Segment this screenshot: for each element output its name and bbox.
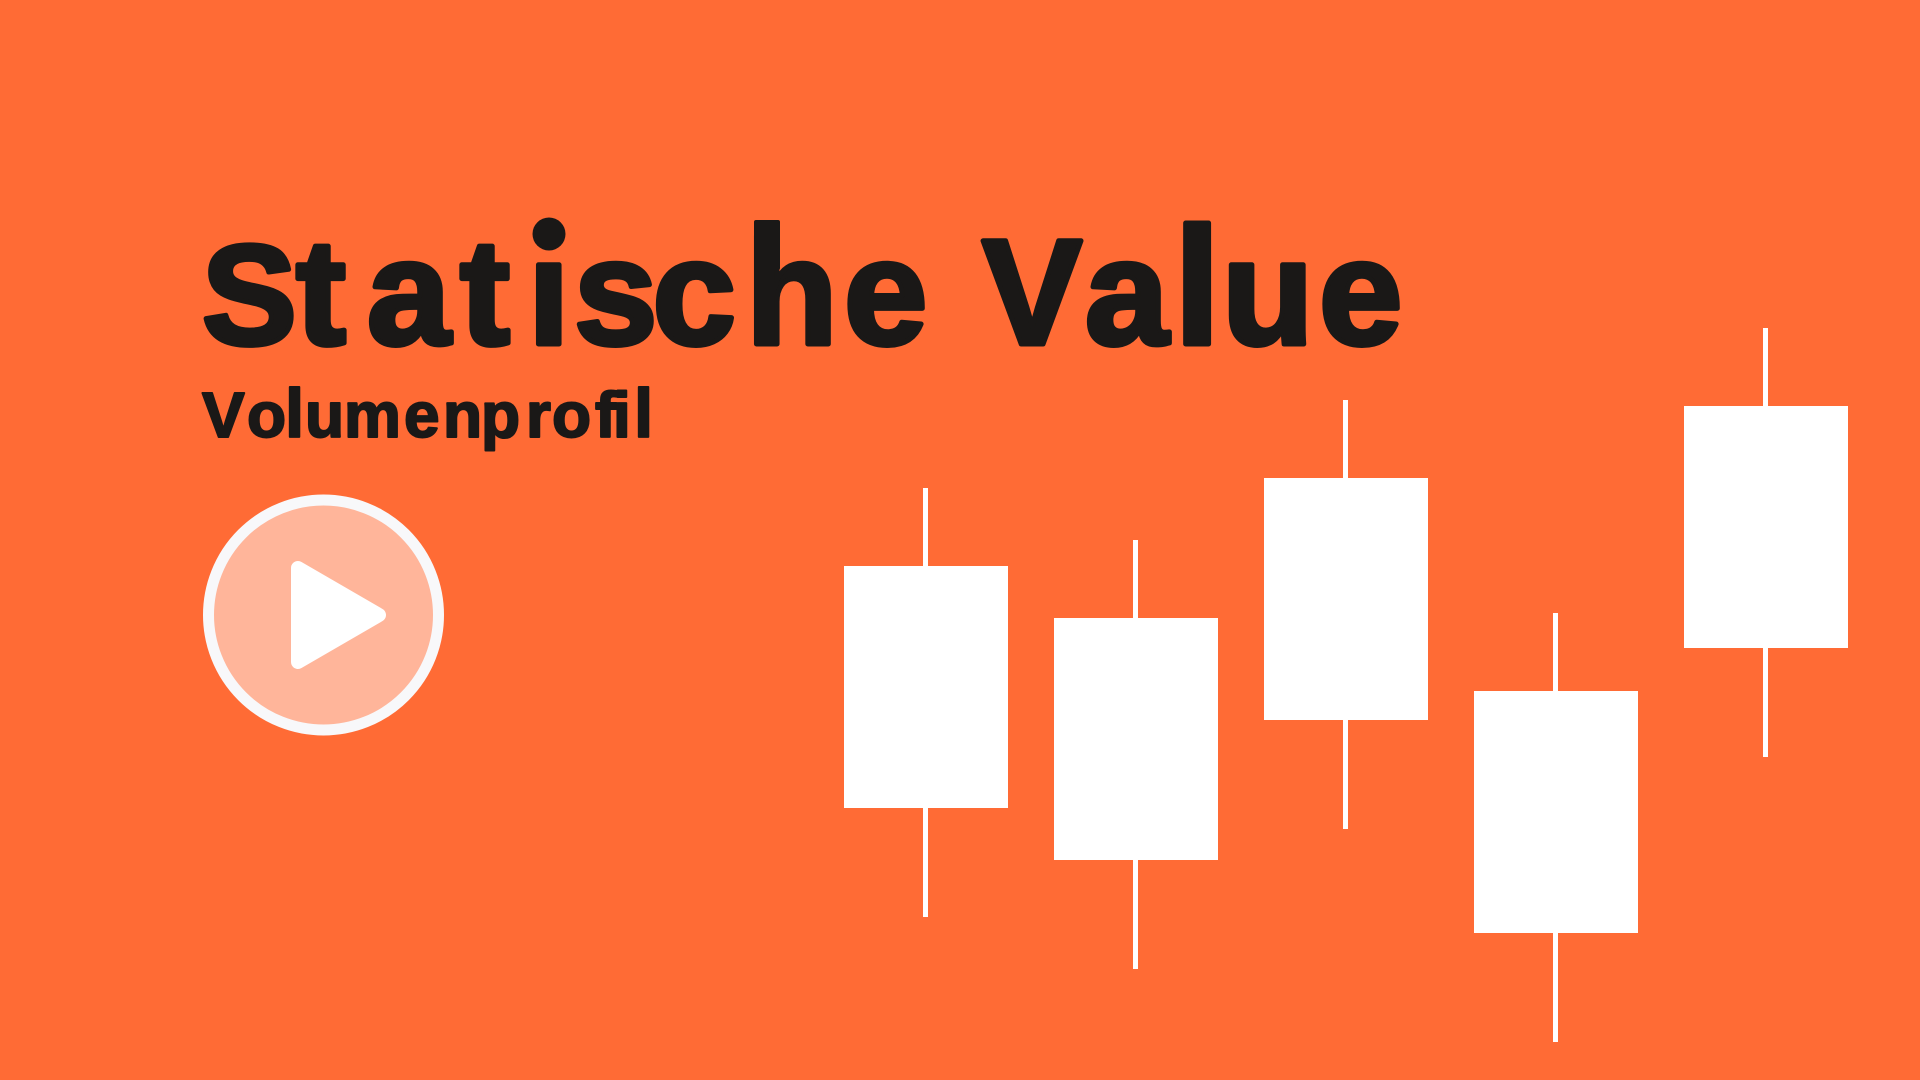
candle 3 <box>1264 400 1428 829</box>
candle 4 <box>1474 613 1638 1042</box>
title: Statische Value <box>202 194 1402 380</box>
candle 2 <box>1054 540 1218 969</box>
subtitle: Volumenprofil <box>202 375 653 452</box>
candle 5 <box>1684 328 1848 757</box>
candlestick chart <box>844 328 1848 1042</box>
candle 1 <box>844 488 1008 917</box>
icon: play button <box>208 500 438 730</box>
